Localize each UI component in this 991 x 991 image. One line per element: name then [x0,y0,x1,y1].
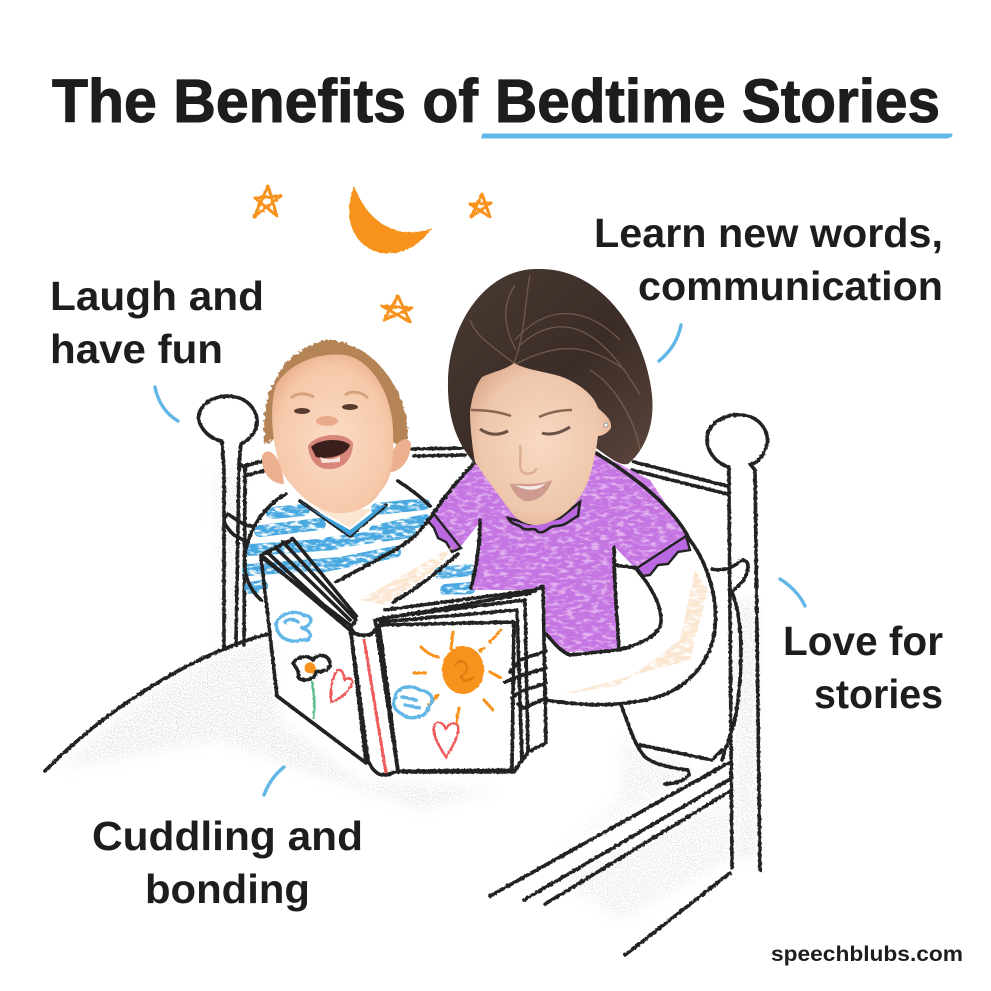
icon: star right [470,194,491,217]
title: The Benefits of [52,67,479,135]
ears [262,439,411,484]
face [272,354,393,513]
label: cuddling and bonding: bonding [145,866,310,912]
icon: star lower [382,296,412,322]
label: love for stories [783,618,943,717]
title: Bedtime Stories [495,67,940,135]
bed frame [45,396,767,955]
small heart [331,670,353,702]
red spine line [364,639,386,773]
child head [262,340,411,513]
mother arm peach shading [560,570,708,695]
cloud on left page [276,612,311,641]
large heart [434,723,458,757]
icon: moon [351,190,428,252]
label: love for stories: Love for [783,618,943,664]
label: learn new words: communication [638,263,943,309]
mother head [448,269,653,525]
hair [448,269,653,465]
label: laugh and have fun: Laugh and [50,273,264,319]
child shirt outline [245,481,430,600]
flower [293,655,330,719]
sun [442,646,484,694]
brows [471,410,572,417]
title underline [486,134,947,138]
hair [264,340,408,450]
earring [604,423,608,427]
label: cuddling and bonding: Cuddling and [92,813,363,859]
child body [245,481,470,600]
nose shadow [520,445,536,474]
mouth [308,435,353,469]
mouth [510,480,552,501]
title [52,67,940,135]
right cover [379,622,514,771]
eyes [480,427,570,434]
child shirt stripes [248,504,470,590]
left bedpost [199,396,257,648]
headboard rails [244,448,727,494]
blue accent ticks [155,325,805,795]
blanket and bed shading [60,470,758,920]
sleeve trim left [427,514,461,552]
label: laugh and have fun: have fun [50,326,223,372]
mother fingers [505,651,546,708]
blanket over mother legs [621,705,722,784]
night sky doodles [254,186,491,322]
label: cuddling and bonding [92,813,363,912]
shirt outline [336,453,715,705]
eyes [294,408,310,414]
label: learn new words [594,210,943,309]
sleeve trim right [637,536,690,576]
nose [316,416,338,426]
icon: star left [254,186,281,217]
collar scallop [508,502,580,532]
label: laugh and have fun [50,273,264,372]
left pillow [225,514,255,542]
face [470,363,611,525]
brand url: speechblubs.com [771,943,963,966]
child arm peach shading [360,545,455,605]
hair strands [470,275,640,450]
book [261,539,546,775]
left page fan [261,539,357,630]
spine [350,625,398,775]
pages behind right [375,586,546,772]
bed footboard rails [490,762,732,955]
right bedpost [707,415,767,870]
blanket edge [45,634,268,771]
eyebrows [291,392,368,398]
cloud on right page [394,687,432,718]
label: love for stories: stories [814,671,943,717]
label: learn new words: Learn new words, [594,210,943,256]
left page [261,557,366,763]
right pillow [712,560,748,760]
child collar [300,501,386,536]
mother shirt [336,452,715,705]
